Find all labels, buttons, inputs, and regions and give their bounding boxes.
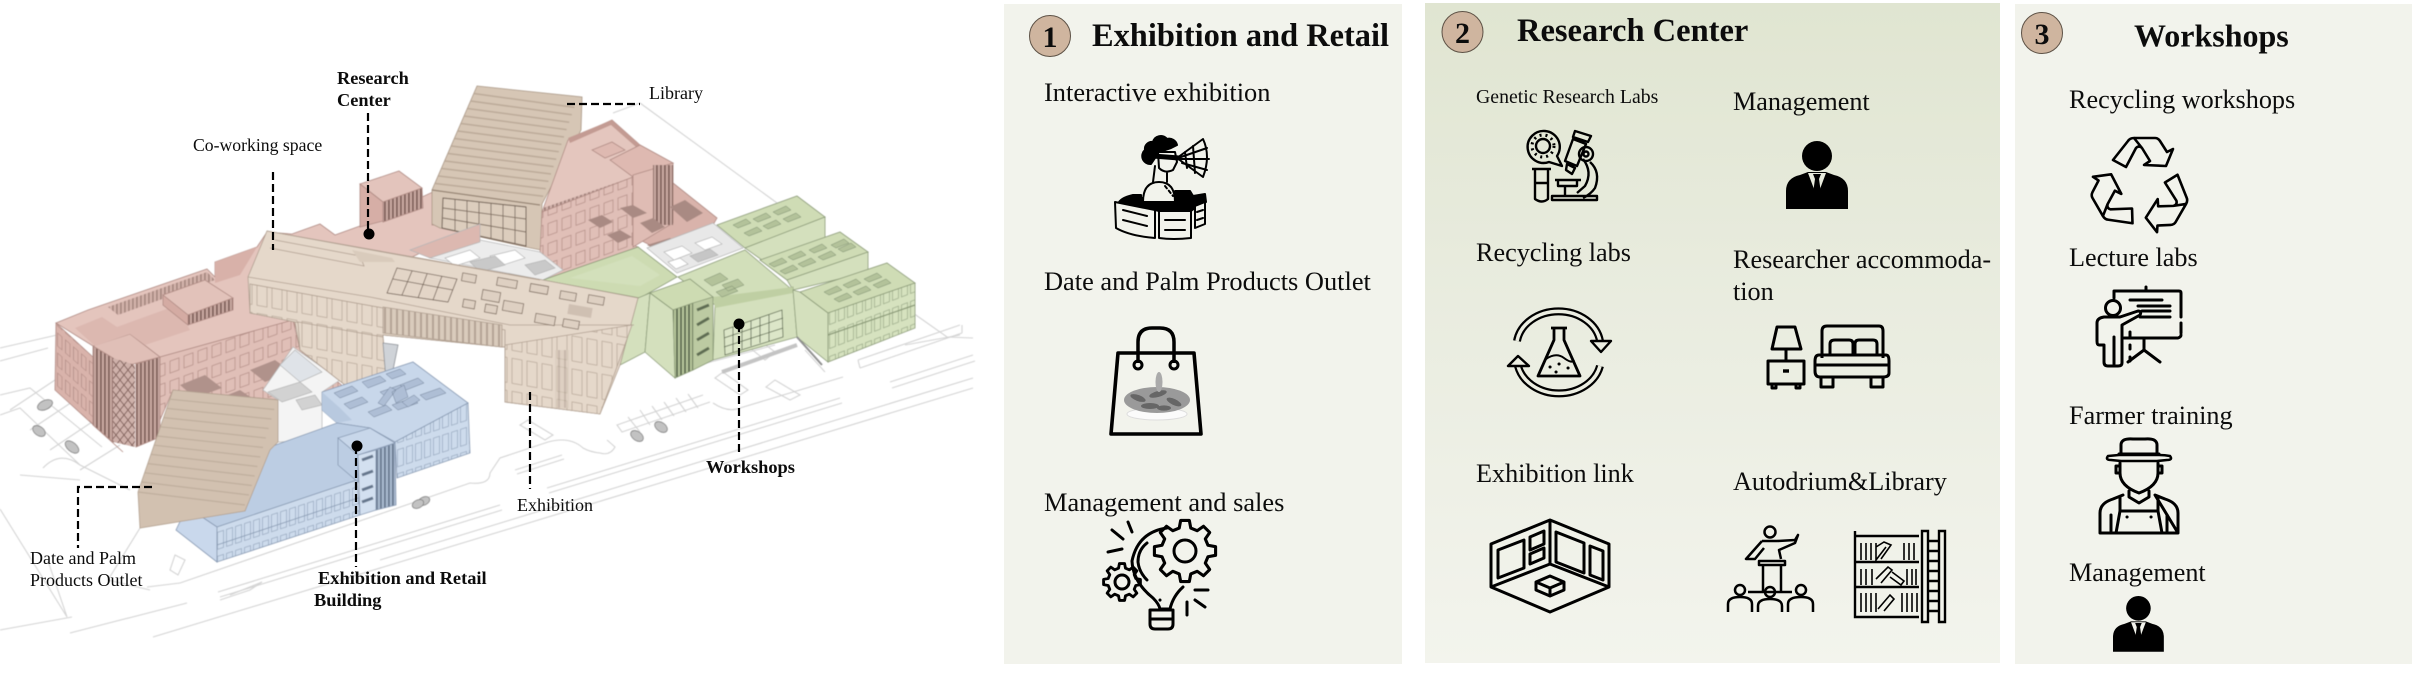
label: autodrium and library: Autodrium&Library	[1733, 467, 1947, 496]
panel 3: workshops	[2015, 4, 2412, 664]
label: interactive exhibition: Interactive exhibition	[1044, 77, 1270, 107]
exhibition and retail building (blue)	[176, 362, 470, 562]
icon: manager	[2113, 596, 2164, 652]
callout: workshops	[706, 318, 795, 477]
callout: research center: Center	[337, 90, 391, 110]
callout: date and palm products outlet	[30, 487, 152, 590]
axonometric building diagram	[0, 68, 975, 637]
research center: east wing (pink)	[540, 120, 717, 280]
icon: lecturer at board	[2097, 287, 2181, 366]
number badge 1: 1	[1042, 21, 1058, 54]
label: date and palm products outlet: Date and Palm Products Outlet	[1044, 266, 1372, 296]
icon: gears in light bulb	[1104, 520, 1216, 629]
heading: Workshops	[2134, 18, 2289, 54]
label: management: Management	[2069, 558, 2206, 587]
icon: lamp and bed	[1768, 326, 1889, 388]
glass atria	[263, 223, 743, 442]
heading: Research Center	[1517, 13, 1748, 49]
icon: microscope	[1528, 131, 1597, 202]
callout: exhibition	[517, 392, 593, 515]
icon: farmer	[2100, 439, 2178, 533]
callout: exhibition and retail building: Building	[314, 590, 382, 610]
label: management and sales: Management and sales	[1044, 487, 1284, 517]
icon: shopping bag with dates	[1111, 328, 1201, 434]
number badge 1	[1030, 16, 1070, 56]
callout: co-working space: Co-working space	[193, 135, 322, 155]
workshops (green)	[543, 196, 915, 378]
label: genetic research labs: Genetic Research Labs	[1476, 86, 1658, 108]
label: exhibition link: Exhibition link	[1476, 459, 1635, 488]
callout: co-working space	[193, 135, 322, 250]
callout: research center	[337, 68, 409, 240]
callout: date and palm products outlet: Products Outlet	[30, 570, 142, 590]
label: lecture labs: Lecture labs	[2069, 243, 2198, 272]
number badge 3: 3	[2034, 18, 2050, 51]
heading: Exhibition and Retail	[1092, 18, 1389, 54]
panel background	[1425, 3, 2000, 663]
callout: date and palm products outlet: Date and Palm	[30, 548, 136, 568]
icon: speaker and audience	[1728, 526, 1813, 612]
label: recycling labs: Recycling labs	[1476, 238, 1631, 267]
icon: VR exhibition	[1115, 136, 1209, 239]
icon: recycling arrows	[2083, 138, 2197, 238]
label: researcher accommodation: Researcher accommoda-	[1733, 245, 1991, 274]
date and palm products outlet (tan, ribbed)	[138, 390, 278, 528]
library tower (tan, ribbed)	[432, 86, 582, 250]
site roads, parking and building massing	[0, 86, 975, 637]
exhibition bridge building (beige)	[248, 231, 638, 414]
callout: exhibition and retail building	[314, 440, 487, 610]
site roads and parking	[0, 103, 975, 637]
label: researcher accommodation: tion	[1733, 277, 1774, 306]
icon: flask in recycling cycle	[1508, 311, 1611, 393]
label: recycling workshops: Recycling workshops	[2069, 85, 2295, 114]
icon: exhibition room	[1491, 520, 1609, 612]
panel 1: exhibition and retail	[1004, 4, 1402, 664]
callout: research center: Research	[337, 68, 409, 88]
solar panels on retail roof	[334, 369, 446, 417]
parked cars	[31, 398, 669, 510]
number badge 2	[1442, 12, 1483, 52]
panel background	[1004, 4, 1402, 664]
panel background	[2015, 4, 2412, 664]
icon: manager	[1786, 141, 1848, 209]
icon: bookshelf with ladder	[1855, 531, 1945, 622]
research center: west wing (pink)	[55, 171, 480, 452]
label: farmer training: Farmer training	[2069, 401, 2233, 430]
callout: exhibition: Exhibition	[517, 495, 593, 515]
callout: library: Library	[649, 83, 703, 103]
solar panels on workshop roofs	[704, 206, 891, 302]
callout: workshops: Workshops	[706, 457, 795, 477]
callout: library	[567, 83, 703, 104]
number badge 3	[2022, 12, 2062, 54]
panel 2: research center	[1425, 3, 2000, 663]
label: management: Management	[1733, 87, 1870, 116]
callout: exhibition and retail building: Exhibition and Retail	[318, 568, 487, 588]
number badge 2: 2	[1455, 17, 1470, 50]
